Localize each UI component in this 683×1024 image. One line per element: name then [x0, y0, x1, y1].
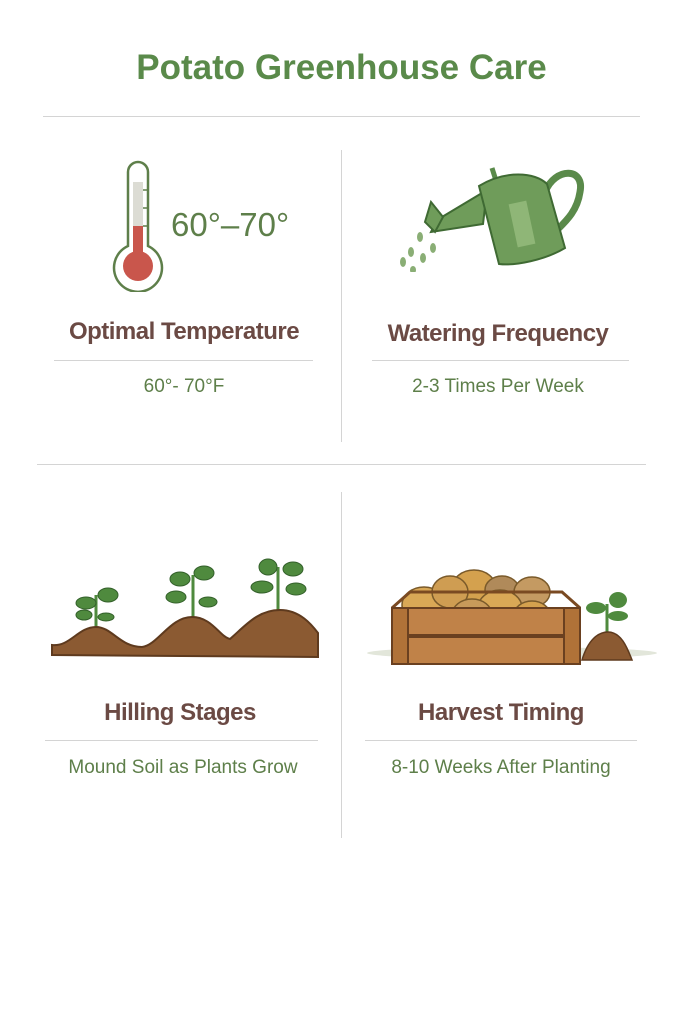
temperature value: 60°–70° — [171, 206, 289, 243]
heading: Watering Frequency: Watering Frequency — [388, 320, 608, 347]
title: Potato Greenhouse Care — [136, 48, 547, 87]
icon: crate of potatoes — [367, 569, 657, 665]
subtext: hilling: Mound Soil as Plants Grow — [68, 757, 298, 778]
panel: temperature — [112, 160, 289, 292]
icon: soil mounds with seedlings — [51, 558, 319, 658]
heading: Optimal Temperature: Optimal Temperature — [69, 318, 299, 345]
heading: Harvest Timing: Harvest Timing — [418, 699, 584, 726]
icon: watering can — [400, 167, 584, 272]
subtext: harvest: 8-10 Weeks After Planting — [391, 757, 611, 778]
subtext: watering: 2-3 Times Per Week — [412, 376, 584, 397]
heading: Hilling Stages: Hilling Stages — [104, 699, 256, 726]
subtext: temperature: 60°- 70°F — [144, 376, 224, 397]
icon: thermometer — [112, 160, 164, 292]
